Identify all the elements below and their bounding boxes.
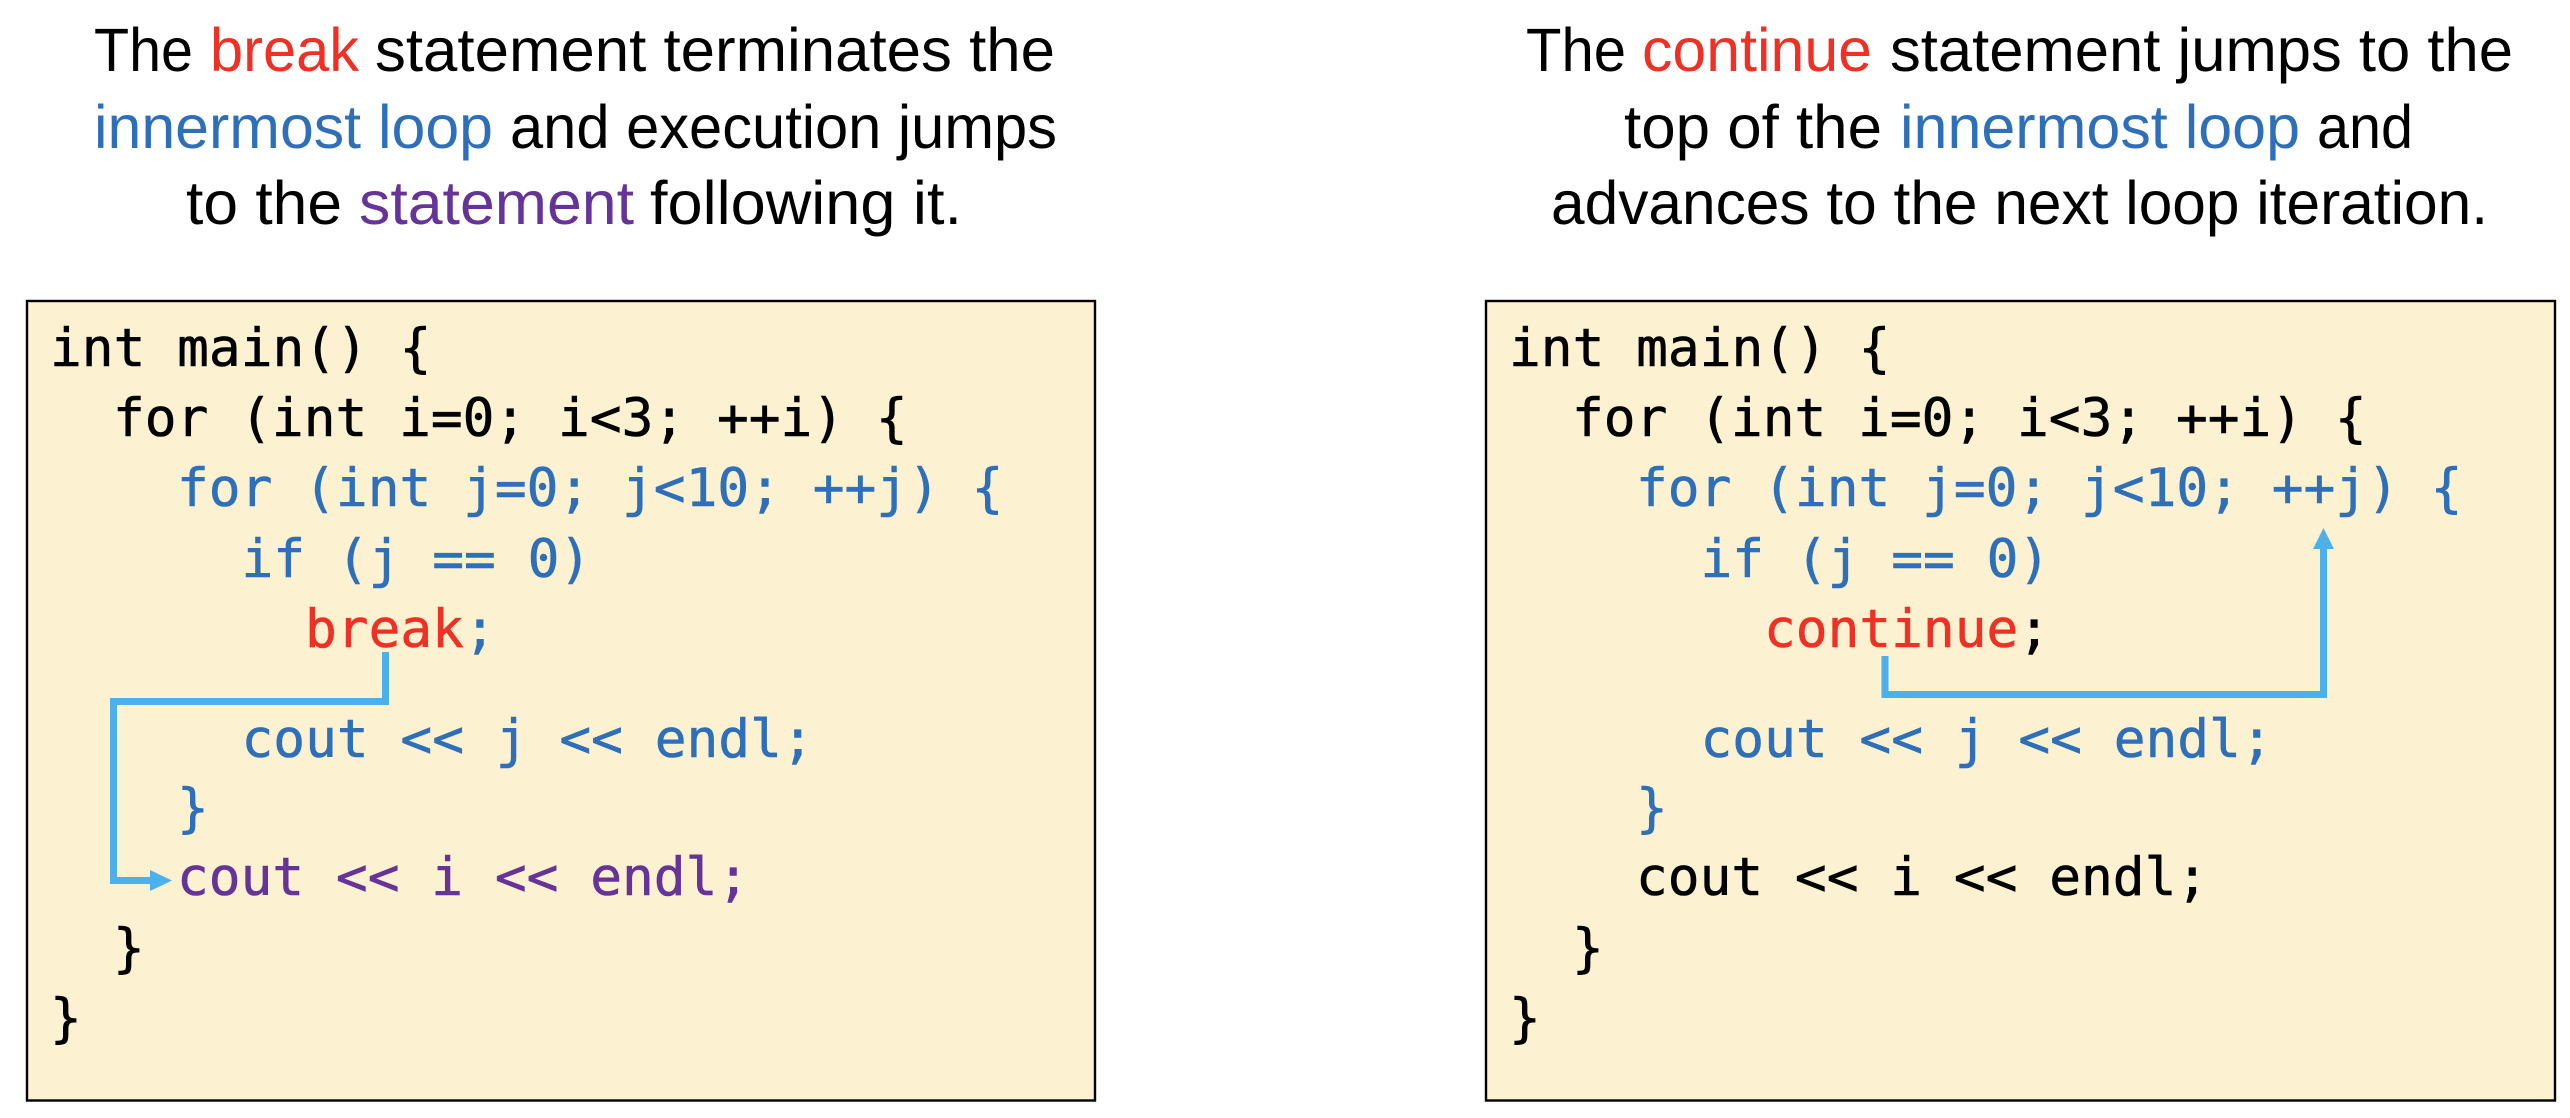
heading: continue statement description: innermost loop bbox=[1900, 93, 2300, 161]
heading: continue statement description: and bbox=[2317, 93, 2413, 161]
heading: break statement description: and execution jumps bbox=[510, 93, 1057, 161]
code: break example: cout << i << endl; bbox=[177, 847, 749, 908]
code: break example: if (j == 0) bbox=[242, 529, 591, 590]
code: break example: int main() { bbox=[50, 318, 431, 379]
code box: break example bbox=[27, 301, 1095, 1100]
heading: continue statement description bbox=[1526, 16, 2513, 237]
code: continue example: } bbox=[1572, 918, 1604, 979]
arrow: break jumps to statement after loop bbox=[114, 652, 386, 891]
code: continue example: cout << j << endl; bbox=[1700, 709, 2273, 770]
code: break example bbox=[50, 318, 1003, 1049]
code: continue example: continue; bbox=[1764, 599, 2050, 660]
heading: continue statement description: The bbox=[1526, 16, 1626, 84]
arrow: continue jumps to loop increment bbox=[1885, 528, 2334, 694]
code: break example: } bbox=[113, 918, 145, 979]
code: continue example: if (j == 0) bbox=[1700, 529, 2050, 590]
code: continue example: } bbox=[1509, 988, 1541, 1049]
heading: break statement description: to the bbox=[186, 169, 342, 237]
heading: break statement description: following it. bbox=[650, 169, 962, 237]
heading: break statement description: The bbox=[94, 16, 193, 84]
panel: continue statement bbox=[1486, 16, 2555, 1100]
heading: break statement description bbox=[94, 16, 1057, 237]
heading: continue statement description: continue bbox=[1642, 16, 1872, 84]
heading: break statement description: break bbox=[210, 16, 359, 84]
code: break example: break; bbox=[305, 599, 496, 660]
code: break example: cout << j << endl; bbox=[242, 709, 814, 770]
code: break example: } bbox=[177, 778, 209, 839]
heading: break statement description: statement bbox=[359, 169, 634, 237]
heading: continue statement description: top of the bbox=[1624, 93, 1882, 161]
heading: continue statement description: statement jumps to the bbox=[1890, 16, 2513, 84]
code: continue example bbox=[1509, 318, 2462, 1049]
code: continue example: } bbox=[1636, 778, 1668, 839]
code: break example: for (int j=0; j<10; ++j) { bbox=[177, 458, 1003, 519]
code: continue example: for (int j=0; j<10; ++j) { bbox=[1636, 458, 2462, 519]
code: break example: for (int i=0; i<3; ++i) { bbox=[113, 388, 908, 449]
panel: break statement bbox=[27, 16, 1095, 1100]
code: continue example: int main() { bbox=[1509, 318, 1890, 379]
code box: continue example bbox=[1486, 301, 2555, 1100]
code: break example: } bbox=[50, 988, 82, 1049]
heading: break statement description: innermost loop bbox=[94, 93, 493, 161]
code: continue example: cout << i << endl; bbox=[1636, 847, 2208, 908]
heading: break statement description: statement terminates the bbox=[375, 16, 1055, 84]
heading: continue statement description: advances to the next loop iteration. bbox=[1551, 169, 2488, 237]
code: continue example: for (int i=0; i<3; ++i) { bbox=[1572, 388, 2367, 449]
